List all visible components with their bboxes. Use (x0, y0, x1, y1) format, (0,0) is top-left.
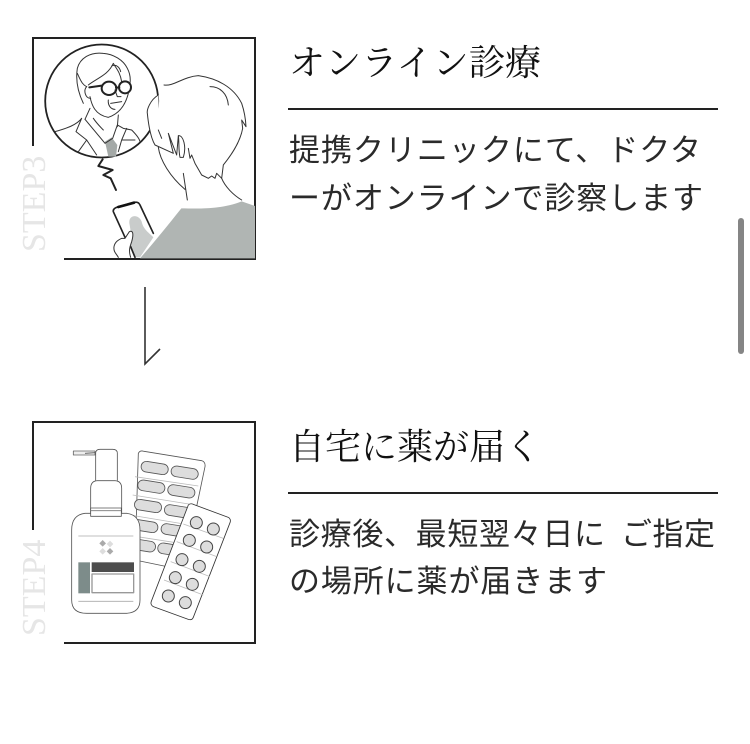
heading: home delivery: 自宅に薬が届く (289, 427, 541, 467)
panel: step 3 (16, 38, 718, 259)
heading: online consultation: オンライン診療 (289, 43, 541, 83)
illustration: online consultation (45, 44, 255, 258)
body text: step 4 (289, 517, 715, 599)
scrollbar (738, 218, 744, 354)
arrow: step 3 to step 4 (145, 287, 160, 364)
patient shirt (140, 201, 255, 258)
panel: step 4 (16, 422, 718, 643)
phone and hand (98, 159, 153, 257)
body text: step 3: ーがオンラインで診察します (289, 181, 703, 216)
illustration frame: step 3 (33, 38, 255, 259)
bottle (72, 449, 140, 613)
rule (288, 108, 718, 110)
body text: step 4: の場所に薬が届きます (289, 564, 607, 599)
back blister pack (127, 451, 205, 570)
body text: step 4: ご指定 (621, 517, 715, 552)
illustration: medicine (72, 449, 230, 620)
doctor bubble (45, 44, 158, 158)
rule (288, 492, 718, 494)
step label: STEP3: STEP3 (16, 156, 53, 252)
body text: step 3 (289, 133, 703, 216)
body text: step 3: 提携クリニックにて、ドクタ (289, 133, 701, 168)
body text: step 4: 診療後、最短翌々日に (289, 517, 605, 552)
front blister pack (151, 504, 230, 620)
patient head (147, 76, 246, 200)
doctor (55, 53, 140, 157)
step label: STEP4: STEP4 (16, 540, 53, 636)
illustration frame: step 4 (33, 422, 255, 643)
